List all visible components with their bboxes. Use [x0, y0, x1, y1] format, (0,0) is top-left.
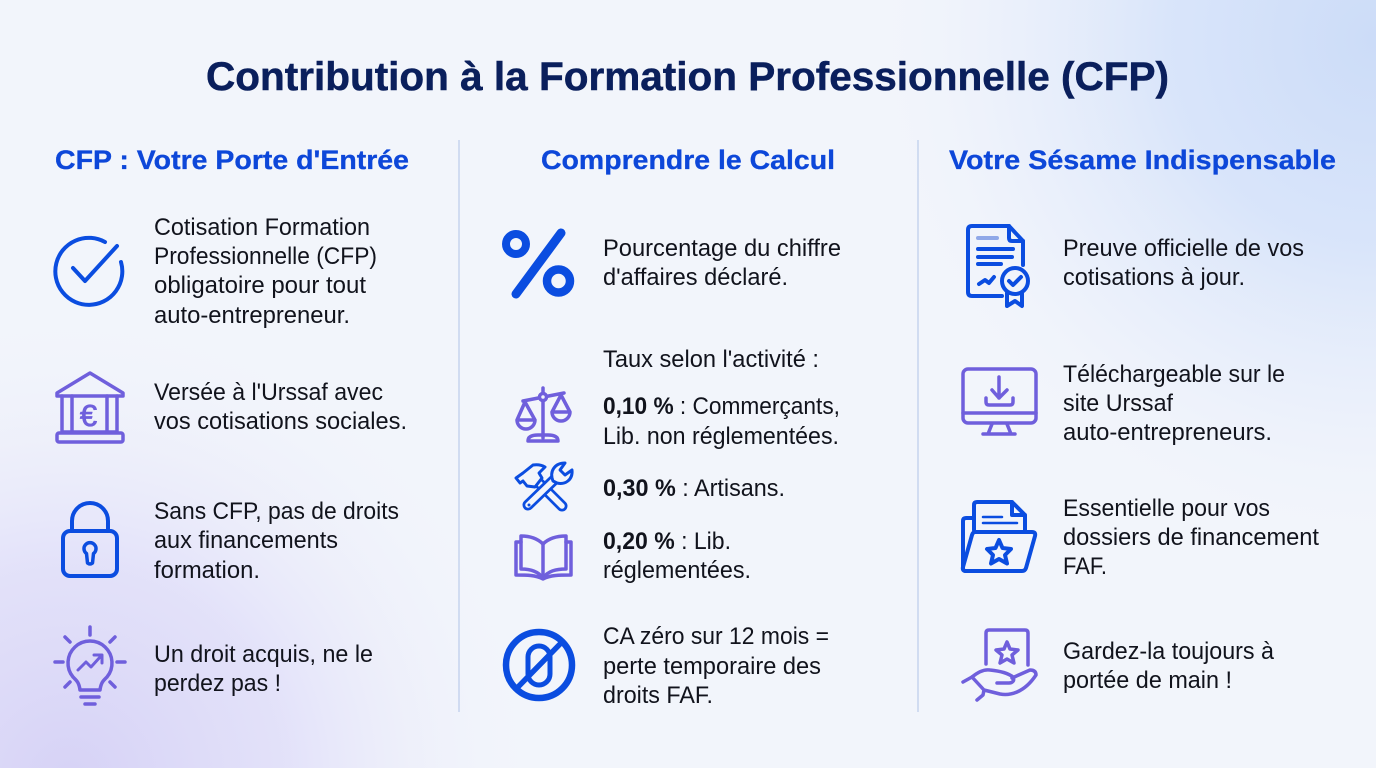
- text: essential for FAF: dossiers de financement: [1063, 524, 1319, 551]
- text: percentage of turnover: Pourcentage du chiffre: [603, 235, 841, 262]
- icon: bank with euro: [57, 373, 123, 442]
- text: keep at hand: [1063, 638, 1275, 694]
- icon: certificate with seal: [968, 226, 1028, 306]
- icon: check circle: [55, 238, 122, 305]
- icon: padlock: [63, 503, 117, 576]
- text: essential for FAF: [1063, 495, 1319, 580]
- text: mandatory contribution: auto-entrepreneur.: [154, 302, 350, 329]
- text: no CFP no rights: [154, 498, 399, 584]
- icon: scales: [517, 388, 570, 441]
- text: mandatory contribution: Cotisation Formation: [154, 214, 370, 241]
- text: essential for FAF: Essentielle pour vos: [1063, 495, 1270, 522]
- text: downloadable: [1063, 361, 1285, 446]
- text: official proof: Preuve officielle de vos: [1063, 235, 1304, 262]
- text: downloadable: site Urssaf: [1063, 390, 1173, 417]
- icon: percent: [506, 233, 570, 294]
- text: paid to Urssaf: vos cotisations sociales.: [154, 408, 407, 435]
- text: rates by activity: Taux selon l'activité :: [603, 346, 819, 373]
- text: zero turnover warning: perte temporaire des: [603, 653, 821, 680]
- text: zero turnover warning: [603, 623, 829, 709]
- text: mandatory contribution: obligatoire pour tout: [154, 272, 366, 299]
- text: zero turnover warning: CA zéro sur 12 mois =: [603, 623, 829, 650]
- icon: hand holding star card: [963, 630, 1036, 700]
- icon: folder with star: [963, 502, 1035, 571]
- panel: CFP, votre porte d'entrée: [55, 145, 409, 704]
- heading: column 1: CFP : Votre Porte d'Entrée: [55, 145, 409, 175]
- title: Contribution à la Formation Professionnelle (CFP): [206, 55, 1169, 99]
- text: no CFP no rights: Sans CFP, pas de droits: [154, 498, 399, 525]
- text: official proof: cotisations à jour.: [1063, 264, 1245, 291]
- text: zero turnover warning: droits FAF.: [603, 682, 713, 709]
- icon: monitor with download: [963, 369, 1036, 434]
- text: rate 0,20: 0,20 % : Lib.: [603, 528, 731, 555]
- icon: crossed-out zero: [506, 632, 572, 698]
- text: rate 0,20: réglementées.: [603, 557, 751, 584]
- text: rate 0,10: [603, 393, 840, 450]
- text: percentage of turnover: [603, 235, 841, 291]
- text: mandatory contribution: Professionnelle (CFP): [154, 243, 377, 270]
- text: rate 0,30: 0,30 % : Artisans.: [603, 475, 785, 502]
- icon: hammer and wrench: [516, 463, 572, 506]
- text: keep at hand: Gardez-la toujours à: [1063, 638, 1275, 665]
- text: paid to Urssaf: [154, 379, 407, 435]
- text: acquired right: Un droit acquis, ne le: [154, 641, 373, 668]
- icon: light bulb with rising arrow: [55, 627, 125, 704]
- text: essential for FAF: FAF.: [1063, 553, 1107, 580]
- text: downloadable: auto-entrepreneurs.: [1063, 419, 1272, 446]
- text: keep at hand: portée de main !: [1063, 667, 1232, 694]
- text: no CFP no rights: formation.: [154, 557, 260, 584]
- icon: bank with euro: €: [80, 398, 97, 433]
- panel: comprendre le calcul: [506, 145, 841, 709]
- text: mandatory contribution: [154, 214, 377, 329]
- heading: column 2: Comprendre le Calcul: [541, 145, 835, 175]
- icon: open book: [516, 536, 571, 579]
- text: paid to Urssaf: Versée à l'Urssaf avec: [154, 379, 383, 406]
- panel: votre sésame indispensable: [949, 145, 1336, 700]
- text: no CFP no rights: aux financements: [154, 527, 338, 554]
- text: rate 0,20: [603, 528, 751, 584]
- text: acquired right: [154, 641, 373, 697]
- text: percentage of turnover: d'affaires déclaré.: [603, 264, 788, 291]
- text: downloadable: Téléchargeable sur le: [1063, 361, 1285, 388]
- text: rate 0,10: Lib. non réglementées.: [603, 423, 839, 450]
- text: rate 0,10: 0,10 % : Commerçants,: [603, 393, 840, 420]
- text: acquired right: perdez pas !: [154, 670, 281, 697]
- heading: column 3: Votre Sésame Indispensable: [949, 145, 1336, 175]
- text: official proof: [1063, 235, 1304, 291]
